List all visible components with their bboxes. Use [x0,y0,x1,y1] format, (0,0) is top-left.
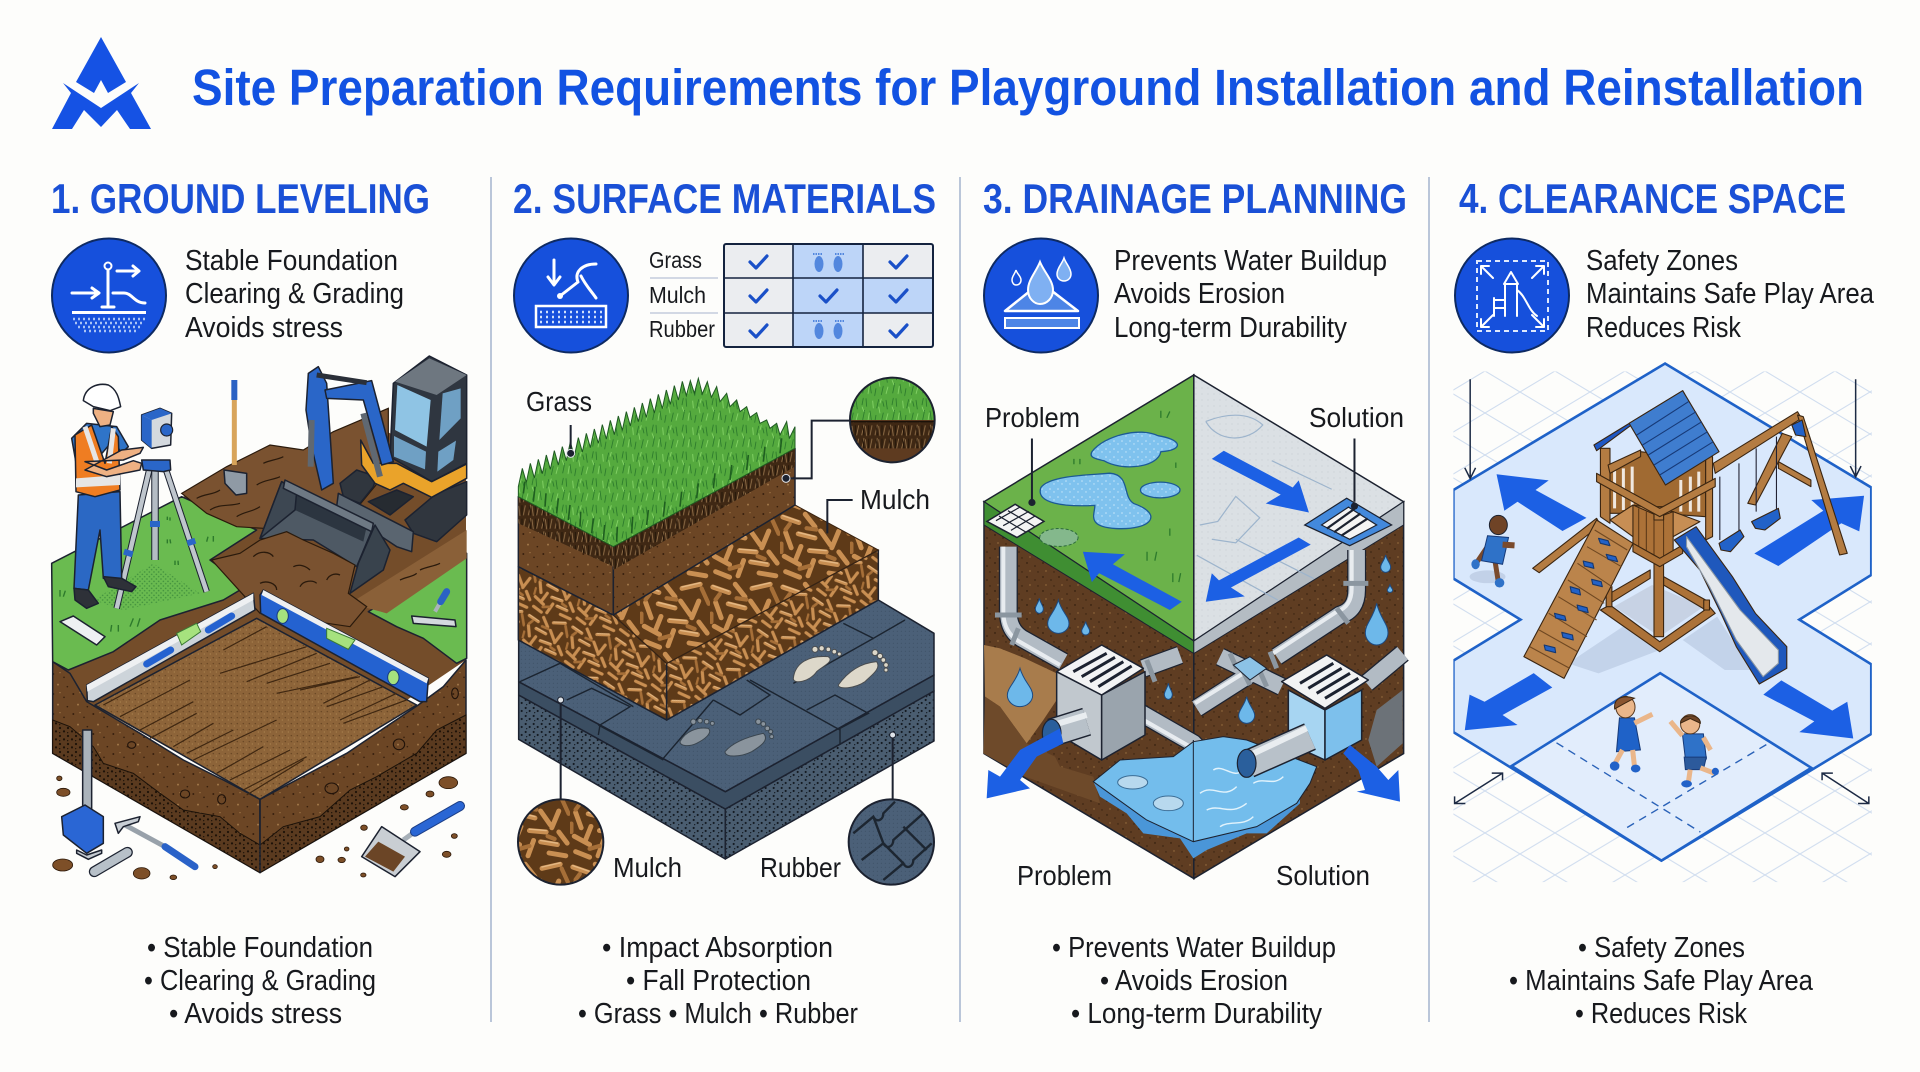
icon text: ground leveling [185,245,404,344]
callout leaders [1028,439,1358,510]
shirt [72,423,128,467]
tag on grass [60,616,105,645]
tower back wall [1610,452,1706,517]
heading: surface materials: 2. SURFACE MATERIALS [513,175,936,222]
head [93,408,113,427]
icon text: clearance space [1586,245,1875,344]
bullet list: clearance space [1509,932,1814,1030]
water drops [1007,555,1393,723]
icon text: ground leveling: Stable Foundation [185,245,398,277]
dirt crumbs [53,776,458,880]
icon text: drainage planning: Long-term Durability [1114,312,1347,344]
heading: drainage planning: 3. DRAINAGE PLANNING [983,175,1407,222]
climbing wall [1524,518,1633,678]
labels: drainage planning [985,402,1404,891]
bullet list: drainage planning: • Prevents Water Buildup [1052,932,1336,964]
bullet list: surface materials [578,932,858,1030]
play structure [1524,391,1847,684]
bullet list: drainage planning [1052,932,1336,1030]
hammer tool [115,817,195,867]
girl [1610,696,1652,772]
silver level [87,593,255,702]
soil patches [983,645,1403,803]
pipes [995,547,1403,768]
legs [74,492,122,590]
bullet list: ground leveling: • Clearing & Grading [144,965,376,997]
mulch layer [518,505,878,720]
icon: impact surface [514,238,628,352]
boots [74,577,136,608]
shovel [224,380,247,495]
arms [85,447,143,477]
bullet list: clearance space: • Maintains Safe Play Area [1509,965,1814,997]
total station [142,408,173,448]
grass inset circle [850,378,935,462]
base frame [1600,562,1715,652]
outlet pipes [1050,715,1310,764]
bullet list: ground leveling: • Avoids stress [169,998,342,1030]
measuring arrows [1455,379,1869,804]
inner play zone [1512,673,1811,861]
material comparison table [649,244,933,347]
deck [1610,505,1700,537]
icon text: clearance space: Maintains Safe Play Area [1586,278,1875,310]
floor shadows [1568,585,1752,673]
material comparison table: Rubber [649,316,715,342]
labels: drainage planning: Problem [985,402,1080,433]
panel: surface materials [513,175,936,1030]
grass tufts [1074,411,1181,582]
labels: surface materials: Grass [526,386,592,417]
puddles [1040,432,1180,529]
column dividers [491,177,1429,1022]
labels: surface materials [526,386,930,883]
swing frame [1713,412,1847,555]
moss [1040,529,1078,546]
hammer on grass [412,592,456,627]
icon: safety zone [1455,238,1569,352]
bullet list: ground leveling [144,932,376,1030]
illustration: layered surfaces [518,378,935,885]
running child [1470,515,1515,587]
bullet list: clearance space: • Reduces Risk [1575,998,1747,1030]
outlet openings [1042,719,1256,777]
grass front blades [523,438,782,542]
concrete surface [1194,375,1404,641]
left catch basin [1057,645,1145,760]
icon text: drainage planning: Avoids Erosion [1114,278,1285,310]
icon text: drainage planning [1114,245,1387,344]
stake tool [62,730,103,859]
labels: surface materials: Mulch [860,484,930,515]
labels: drainage planning: Solution [1309,402,1404,433]
mulch leader [827,500,853,533]
swing ropes [1720,437,1776,540]
slide [1674,527,1787,684]
ground grid [1453,371,1872,882]
icon text: ground leveling: Avoids stress [185,312,343,344]
roof [1594,391,1719,485]
labels: surface materials: Mulch [613,852,682,883]
icon text: ground leveling: Clearing & Grading [185,278,404,310]
excavated dirt mound [182,408,388,537]
right catch basin [1282,655,1368,760]
mound texture [197,457,283,517]
labels: drainage planning: Problem [1017,860,1112,891]
illustration: underground drainage [983,547,1403,858]
grass leader [567,425,575,457]
hand scoop [362,806,460,877]
levels [53,590,460,880]
bullet list: drainage planning: • Long-term Durability [1071,998,1322,1030]
grass inset leader [782,421,850,482]
icon: leveling [52,238,166,352]
icon: water drops [984,238,1098,352]
metal cylinder [94,852,127,872]
rubber inset circle [849,732,934,885]
icon text: clearance space: Reduces Risk [1586,312,1741,344]
right grate [1305,498,1392,546]
heading: ground leveling: 1. GROUND LEVELING [51,175,430,222]
surface arrows [1083,451,1311,610]
vest [75,425,120,497]
grass tufts [60,517,213,632]
grass left [52,497,257,670]
bullet list: surface materials: • Grass • Mulch • Rubber [578,998,858,1030]
boy [1670,715,1719,787]
left grate [987,504,1044,537]
footprints light [793,646,888,688]
grass right [368,553,467,663]
panel: clearance space [1453,175,1875,1030]
labels: surface materials: Rubber [760,852,841,883]
panel: ground leveling [51,175,467,1030]
ground base [53,430,466,799]
grass layer [518,378,795,547]
footprints grey [680,718,774,756]
surveyor [72,384,207,608]
pipe tee [1233,657,1267,680]
soil block [53,660,466,873]
direction arrows [1465,474,1864,739]
material comparison table: Mulch [649,282,706,308]
swing seats [1719,508,1780,552]
bullet list: drainage planning: • Avoids Erosion [1100,965,1288,997]
bullet list: surface materials: • Fall Protection [626,965,811,997]
green edge strip [984,502,1194,654]
icon text: clearance space: Safety Zones [1586,245,1738,277]
tower lower wall [1633,505,1683,567]
panel: drainage planning [983,175,1407,1030]
rubber base [519,600,934,859]
grass shade under surveyor [93,563,200,610]
soil faces [984,502,1404,879]
material comparison table: Grass [649,247,702,273]
heading: clearance space: 4. CLEARANCE SPACE [1459,175,1846,222]
illustration: clearance zone [1453,364,1872,882]
tripod [117,460,207,608]
soil layer [518,448,795,615]
hard hat [83,384,121,411]
safety zone [1453,364,1871,861]
icon text: drainage planning: Prevents Water Buildup [1114,245,1387,277]
mulch inset circle [518,697,603,885]
green surface [984,375,1194,641]
illustration: excavation site [52,356,467,880]
blue level [260,590,428,702]
discharge arrows [987,728,1400,802]
logo [52,37,151,129]
concrete cracks [1197,415,1332,600]
climbing holds [1544,538,1618,653]
cylinder highlight [94,852,127,872]
illustration: drainage surface [984,375,1404,879]
bullet list: surface materials: • Impact Absorption [602,932,833,964]
bullet list: ground leveling: • Stable Foundation [147,932,373,964]
water pool [1093,737,1317,858]
tower posts and rail [1597,448,1715,540]
levelled plot [95,618,417,799]
soil path [350,530,467,613]
labels: drainage planning: Solution [1276,860,1370,891]
excavator [212,356,467,627]
front dirt pile [212,532,367,627]
concrete edge [1194,502,1404,654]
bullet list: clearance space: • Safety Zones [1578,932,1745,964]
